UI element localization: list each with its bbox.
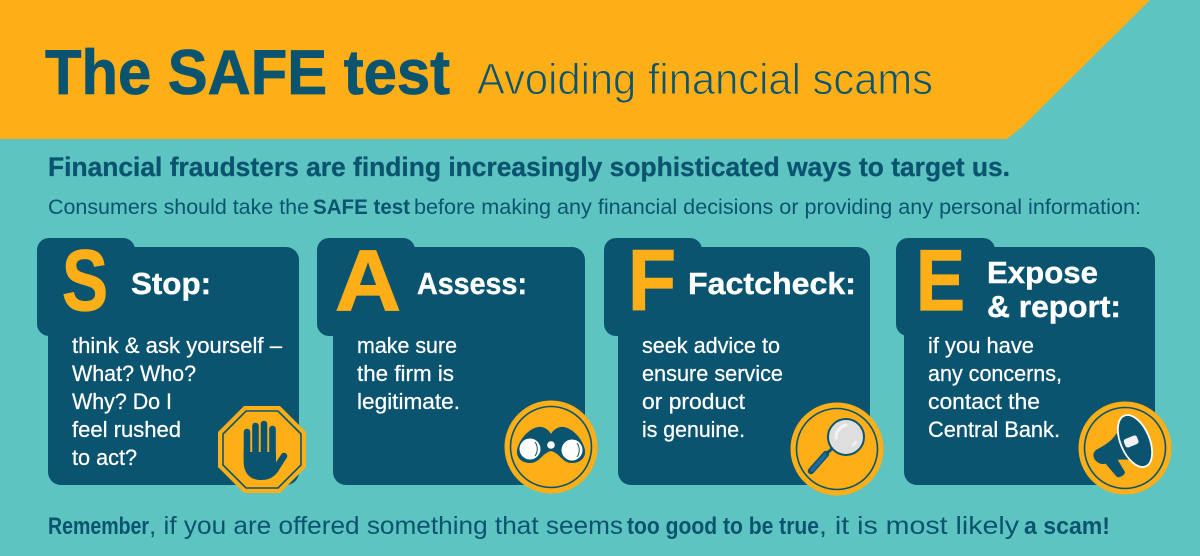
header banner [0, 0, 1150, 139]
body text: factcheck: is genuine. [642, 417, 745, 442]
body text: factcheck: ensure service [642, 361, 783, 386]
body text: expose and report: Central Bank. [928, 417, 1060, 442]
body text: stop: feel rushed [72, 417, 181, 442]
intro sentence: Consumers should take the [48, 196, 309, 219]
icon: stop hand [218, 406, 306, 493]
body text: factcheck: or product [642, 389, 746, 414]
body text: factcheck [642, 333, 783, 442]
closing reminder [48, 512, 1110, 540]
heading: stop: Stop: [131, 266, 211, 301]
body text: assess [357, 333, 460, 414]
body text: factcheck: seek advice to [642, 333, 780, 358]
icon: magnifying glass [790, 402, 884, 496]
body text: expose and report [928, 333, 1062, 442]
heading: assess: Assess: [417, 266, 527, 301]
body text: stop: Why? Do I [72, 389, 172, 414]
intro sentence [48, 196, 1141, 219]
intro heading: Financial fraudsters are finding increasingly sophisticated ways to target us. [48, 152, 1010, 182]
panel: F factcheck [604, 233, 870, 485]
body text: stop: to act? [72, 445, 137, 470]
letter A: A [335, 233, 401, 329]
panel: E expose and report [896, 233, 1155, 485]
icon: binoculars [504, 400, 598, 494]
body text: stop [72, 333, 282, 470]
closing reminder: Remember [48, 513, 149, 540]
body text: expose and report: contact the [928, 389, 1040, 414]
panel: S stop [37, 233, 299, 485]
heading: expose and report [987, 255, 1121, 324]
body text: assess: the firm is [357, 361, 454, 386]
body text: assess: legitimate. [357, 389, 460, 414]
body text: expose and report: any concerns, [928, 361, 1062, 386]
closing reminder: , it is most likely [819, 512, 1020, 540]
body text: stop: What? Who? [72, 361, 196, 386]
heading: expose and report: Expose [987, 255, 1098, 290]
icon: megaphone [1078, 402, 1172, 494]
letter S: S [62, 233, 108, 329]
body text: stop: think & ask yourself – [72, 333, 282, 358]
body text: assess: make sure [357, 333, 457, 358]
letter E: E [916, 233, 965, 329]
body text: expose and report: if you have [928, 333, 1034, 358]
panel: A assess [317, 233, 585, 485]
title: The SAFE test [45, 38, 450, 108]
closing reminder: too good to be true [627, 513, 819, 540]
heading: factcheck: Factcheck: [688, 266, 856, 301]
subtitle: Avoiding financial scams [477, 55, 933, 104]
closing reminder: , if you are offered something that seems [149, 512, 623, 540]
intro sentence: before making any financial decisions or providing any personal information: [414, 196, 1141, 219]
heading: expose and report: & report: [987, 289, 1121, 324]
intro sentence: SAFE test [313, 196, 410, 219]
closing reminder: a scam! [1024, 513, 1110, 540]
letter F: F [628, 233, 676, 329]
